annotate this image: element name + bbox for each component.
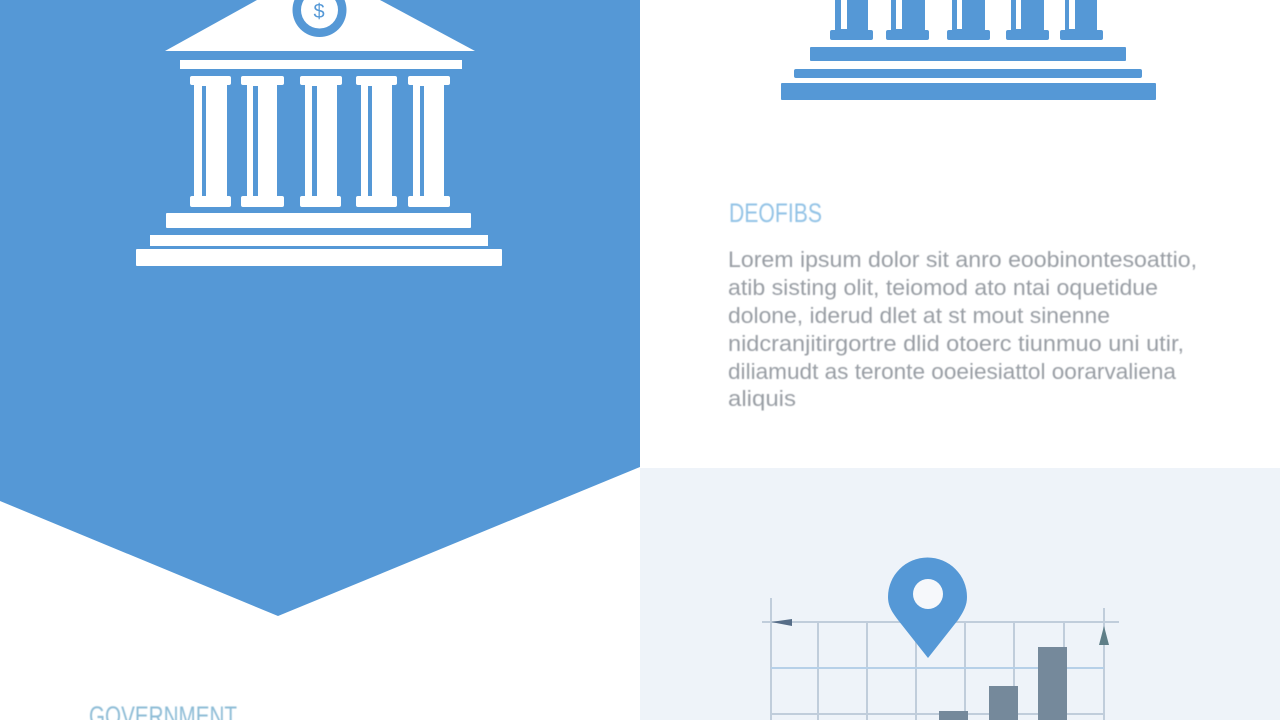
icon: white government building	[136, 0, 502, 266]
text block: description	[728, 247, 1197, 411]
icon: blue government building	[781, 0, 1156, 100]
text block: description: Lorem ipsum dolor sit anro eoobinontesoattio,	[728, 247, 1197, 272]
text block: description: atib sisting olit, teiomod ato ntai oquetidue	[728, 275, 1158, 300]
entablature	[180, 60, 462, 69]
icon: coin medallion	[292, 0, 346, 37]
arrow: left	[771, 619, 792, 626]
panel: light blue chart background	[640, 468, 1280, 720]
stepped base	[136, 213, 502, 266]
text block: description: nidcranjitirgortre dlid otoerc tiunmuo uni utir,	[728, 331, 1184, 356]
icon: coin medallion: $	[313, 1, 325, 23]
text block: description: aliquis	[728, 386, 796, 411]
stepped base	[781, 47, 1156, 100]
arrow: up	[1099, 626, 1109, 645]
pediment	[165, 0, 475, 51]
heading: deofibs: DEOFIBS	[729, 198, 822, 228]
columns	[830, 0, 1103, 40]
column grooves	[841, 0, 1075, 29]
columns	[190, 76, 450, 207]
chart: bar chart with grid	[762, 598, 1119, 720]
text block: description: diliamudt as teronte ooeiesiattol oorarvaliena	[728, 359, 1177, 384]
column grooves	[202, 86, 424, 196]
text block: description: dolone, iderud dlet at st mout sinenne	[728, 303, 1110, 328]
icon: location pin	[888, 558, 967, 658]
bars	[939, 647, 1067, 720]
grid lines	[762, 598, 1119, 720]
panel: blue hexagonal banner	[0, 0, 640, 616]
